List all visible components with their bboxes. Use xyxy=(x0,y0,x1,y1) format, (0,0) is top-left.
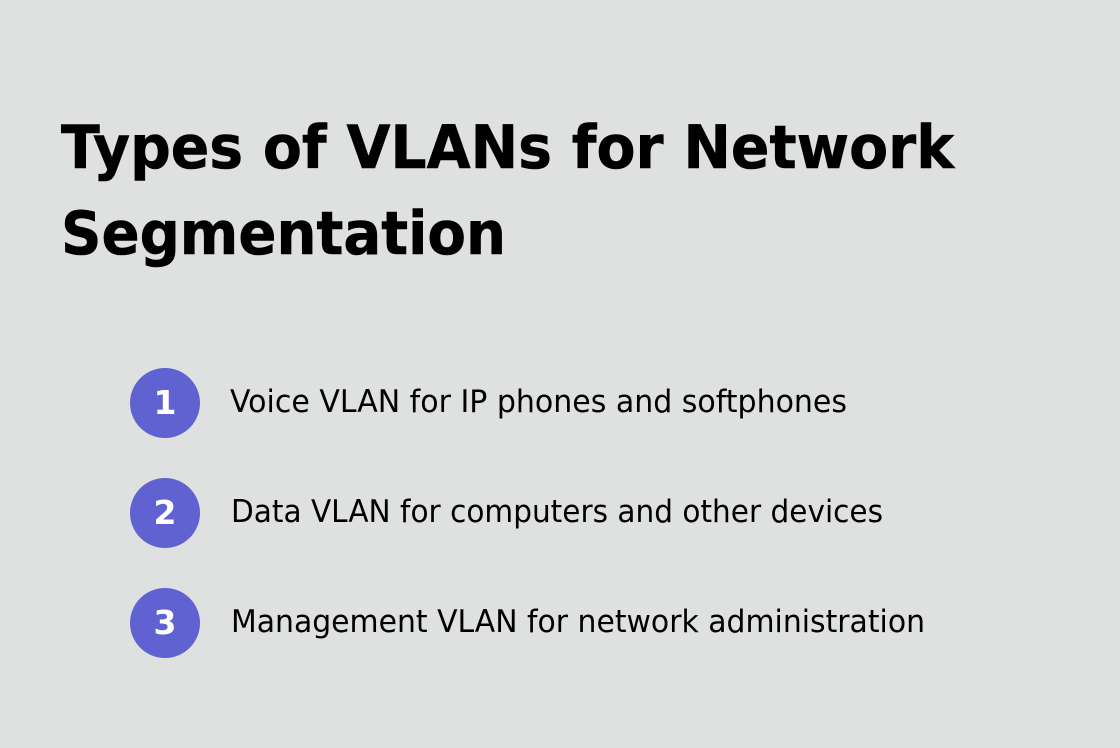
title: Types of VLANs for Network xyxy=(61,113,956,183)
item 1: voice VLAN: Voice VLAN for IP phones and softphones xyxy=(230,384,847,420)
item 2: data VLAN xyxy=(130,478,883,548)
title: Segmentation xyxy=(61,199,506,269)
item 3: management VLAN: 3 xyxy=(154,603,176,642)
item 2: data VLAN: 2 xyxy=(154,493,176,532)
item 2: data VLAN: Data VLAN for computers and other devices xyxy=(231,494,883,530)
list of VLAN types xyxy=(130,368,925,658)
item 1: voice VLAN: 1 xyxy=(154,383,176,422)
item 3: management VLAN xyxy=(130,588,925,658)
item 3: management VLAN: Management VLAN for network administration xyxy=(231,604,925,640)
title xyxy=(61,113,956,269)
item 1: voice VLAN xyxy=(130,368,847,438)
